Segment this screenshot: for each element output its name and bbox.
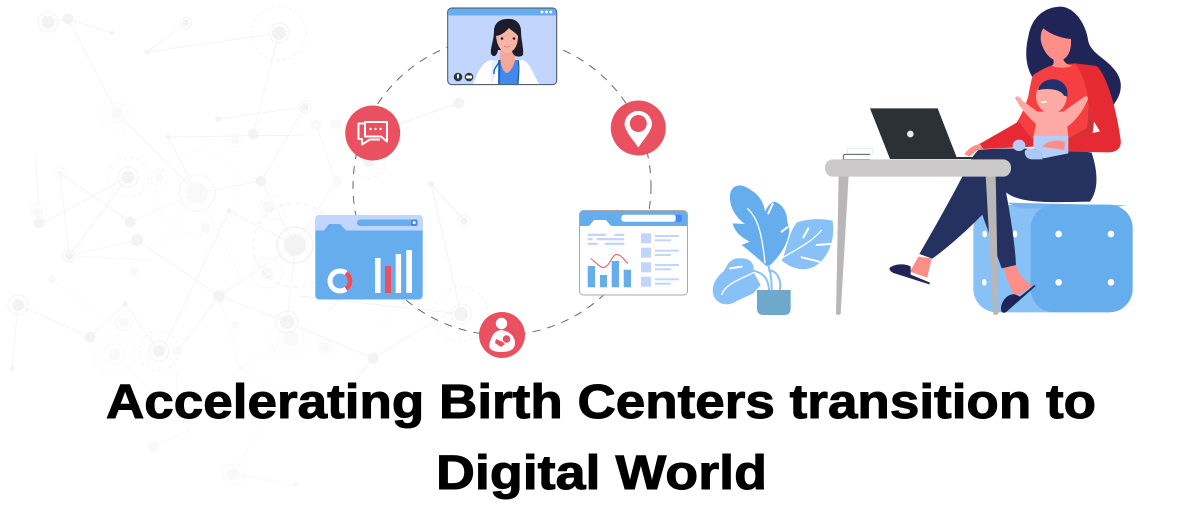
title: Accelerating Birth Centers transition to xyxy=(106,376,1096,429)
video call window with doctor xyxy=(448,8,557,85)
icon: chat bubbles xyxy=(345,106,400,160)
doctor figure xyxy=(473,19,539,84)
donut chart xyxy=(330,271,350,291)
illustration: mother with baby at laptop xyxy=(713,7,1133,315)
bar chart xyxy=(375,250,412,293)
dashed connecting ring xyxy=(353,37,651,335)
icon: location pin xyxy=(611,100,666,156)
woman's legs and feet xyxy=(889,148,1096,313)
woman's sweater xyxy=(979,63,1121,152)
laptop xyxy=(870,108,983,159)
desk xyxy=(825,159,1011,315)
pouf seat xyxy=(973,203,1133,312)
analytics browser window xyxy=(580,210,688,295)
stacked books xyxy=(843,148,873,160)
potted plant xyxy=(713,185,833,315)
woman's hair xyxy=(1026,7,1121,105)
bar and line chart xyxy=(588,254,631,287)
title xyxy=(106,376,1096,500)
icon: breastfeeding mother xyxy=(479,312,525,358)
title: Digital World xyxy=(436,447,767,500)
background: network pattern xyxy=(8,6,488,488)
woman's face xyxy=(1041,28,1073,68)
baby xyxy=(1013,79,1088,159)
dashboard folder with charts xyxy=(315,215,423,300)
